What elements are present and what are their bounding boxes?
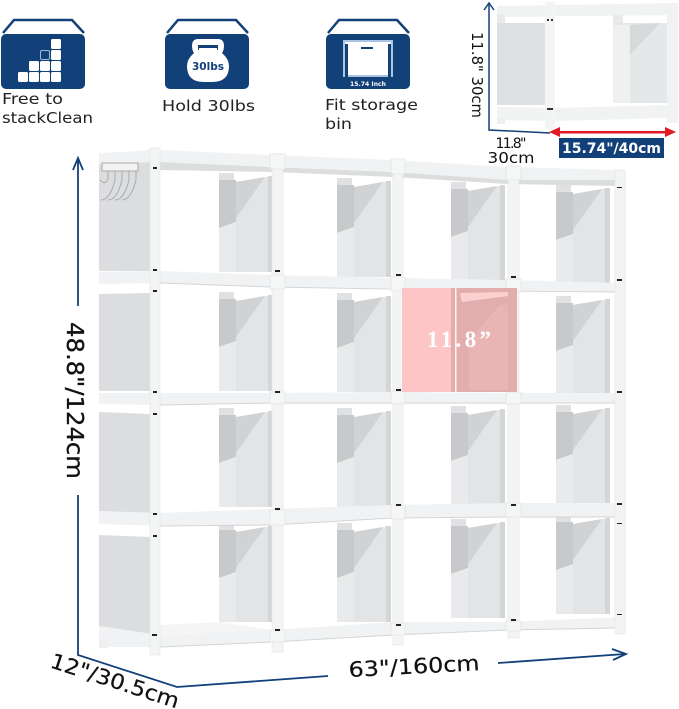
hooks — [100, 163, 138, 200]
highlighted cube: 11.8” — [427, 327, 491, 352]
left side panels — [99, 150, 150, 634]
label: fit storage: Fit storage — [325, 96, 418, 114]
arrow: height top — [73, 158, 83, 306]
label: total depth: 12"/30.5cm — [47, 649, 182, 709]
label: bin: bin — [325, 115, 352, 133]
top shelf shadow — [160, 162, 615, 186]
label: cube height: 11.8" 30cm — [468, 32, 486, 118]
icon: fit storage bin — [326, 20, 410, 89]
label: free to stack: Free to — [2, 90, 63, 108]
icon: hold 30lbs kettlebell — [165, 20, 249, 89]
back panels — [219, 173, 610, 622]
joint collars — [270, 154, 521, 642]
label: total width: 63"/160cm — [348, 651, 480, 682]
arrow: width — [498, 649, 626, 663]
label: cube depth cm: 30cm — [488, 149, 534, 167]
arrow: cube width red — [549, 127, 676, 137]
icon: hold 30lbs kettlebell: 30lbs — [192, 60, 224, 73]
label: cube depth inches: 11.8" — [496, 136, 526, 152]
arrow: cube height and depth — [484, 3, 550, 133]
icon: free to stack — [1, 20, 85, 89]
joint dots — [152, 167, 622, 636]
shelf beam lower shading — [160, 283, 615, 647]
shelf beams — [99, 150, 625, 647]
front posts — [150, 148, 625, 655]
single cube diagram — [497, 2, 678, 129]
arrow: height bottom and depth and width lines — [78, 495, 328, 687]
label: total height: 48.8"/124cm — [61, 322, 87, 479]
label: stack clean: stackClean — [2, 109, 93, 127]
icon: fit storage bin: 15.74 Inch — [350, 80, 386, 88]
label: hold 30lbs: Hold 30lbs — [162, 97, 255, 115]
rear left feet — [99, 640, 108, 648]
callout: cube width: 15.74"/40cm — [562, 141, 661, 157]
highlighted cube — [402, 288, 517, 392]
shelf unit — [99, 148, 625, 655]
